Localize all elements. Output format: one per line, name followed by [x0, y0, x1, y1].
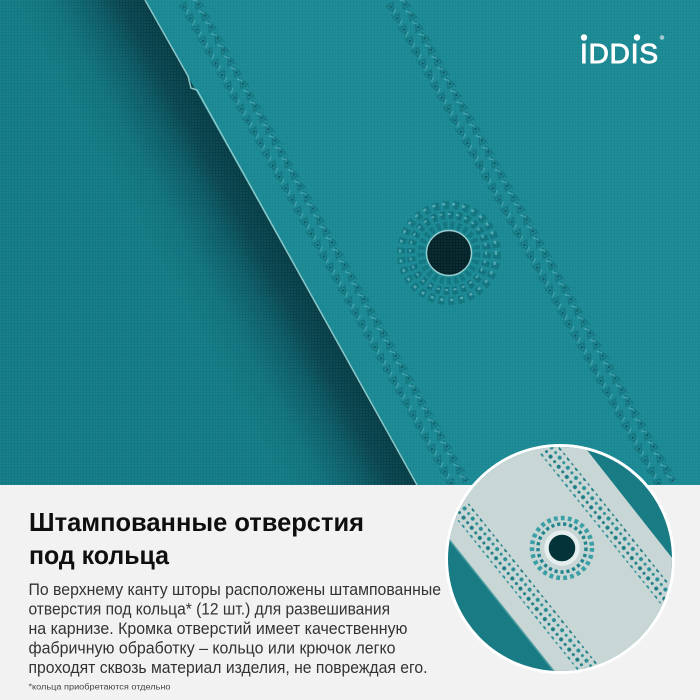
- body text: на карнизе. Кромка отверстий имеет качественную: [28, 620, 408, 638]
- stitching row left: [178, 0, 470, 490]
- fabric weave texture: [0, 0, 700, 485]
- logo dot second i: [634, 34, 640, 41]
- footnote: *кольца приобретаются отдельно: [28, 682, 171, 692]
- inset circle: macro view of the hole: [440, 440, 680, 682]
- hem edge highlight: [145, 0, 417, 485]
- logo dot first i: [581, 34, 587, 41]
- body text: По верхнему канту шторы расположены штампованные: [28, 581, 441, 599]
- inset rosette outer dots: [532, 518, 592, 578]
- stitching row right: [385, 0, 677, 490]
- heading: Штампованные отверстия: [29, 507, 364, 537]
- inset light hem band: [450, 447, 672, 671]
- inset stitching left: [456, 503, 597, 670]
- body text: проходят сквозь материал изделия, не повреждая его.: [28, 659, 428, 677]
- photo: teal curtain close-up: [0, 0, 700, 490]
- inset teal backdrop: [448, 447, 672, 671]
- logo: IDDIS: IDDIS: [580, 38, 658, 69]
- inset edge line: [450, 539, 555, 671]
- inset hole with white rim: [546, 532, 578, 564]
- hem strip: [145, 0, 700, 485]
- body text: [28, 581, 441, 677]
- stamped hole rosette: [400, 204, 497, 301]
- heading: [29, 507, 364, 570]
- hole: [426, 230, 472, 276]
- inset rosette: [532, 518, 592, 578]
- registered mark: [660, 35, 664, 40]
- curtain panel behind the hem: [0, 0, 416, 485]
- body text: отверстия под кольца* (12 шт.) для развешивания: [28, 600, 390, 618]
- white ring: [445, 444, 675, 674]
- inset stitching right: [540, 447, 669, 604]
- inset photo: [448, 447, 672, 671]
- body text: фабричную обработку – кольцо или крючок легко: [28, 640, 396, 658]
- heading: под кольца: [29, 540, 170, 570]
- inset rosette inner dots: [538, 524, 586, 572]
- rosette embossing: [401, 205, 497, 301]
